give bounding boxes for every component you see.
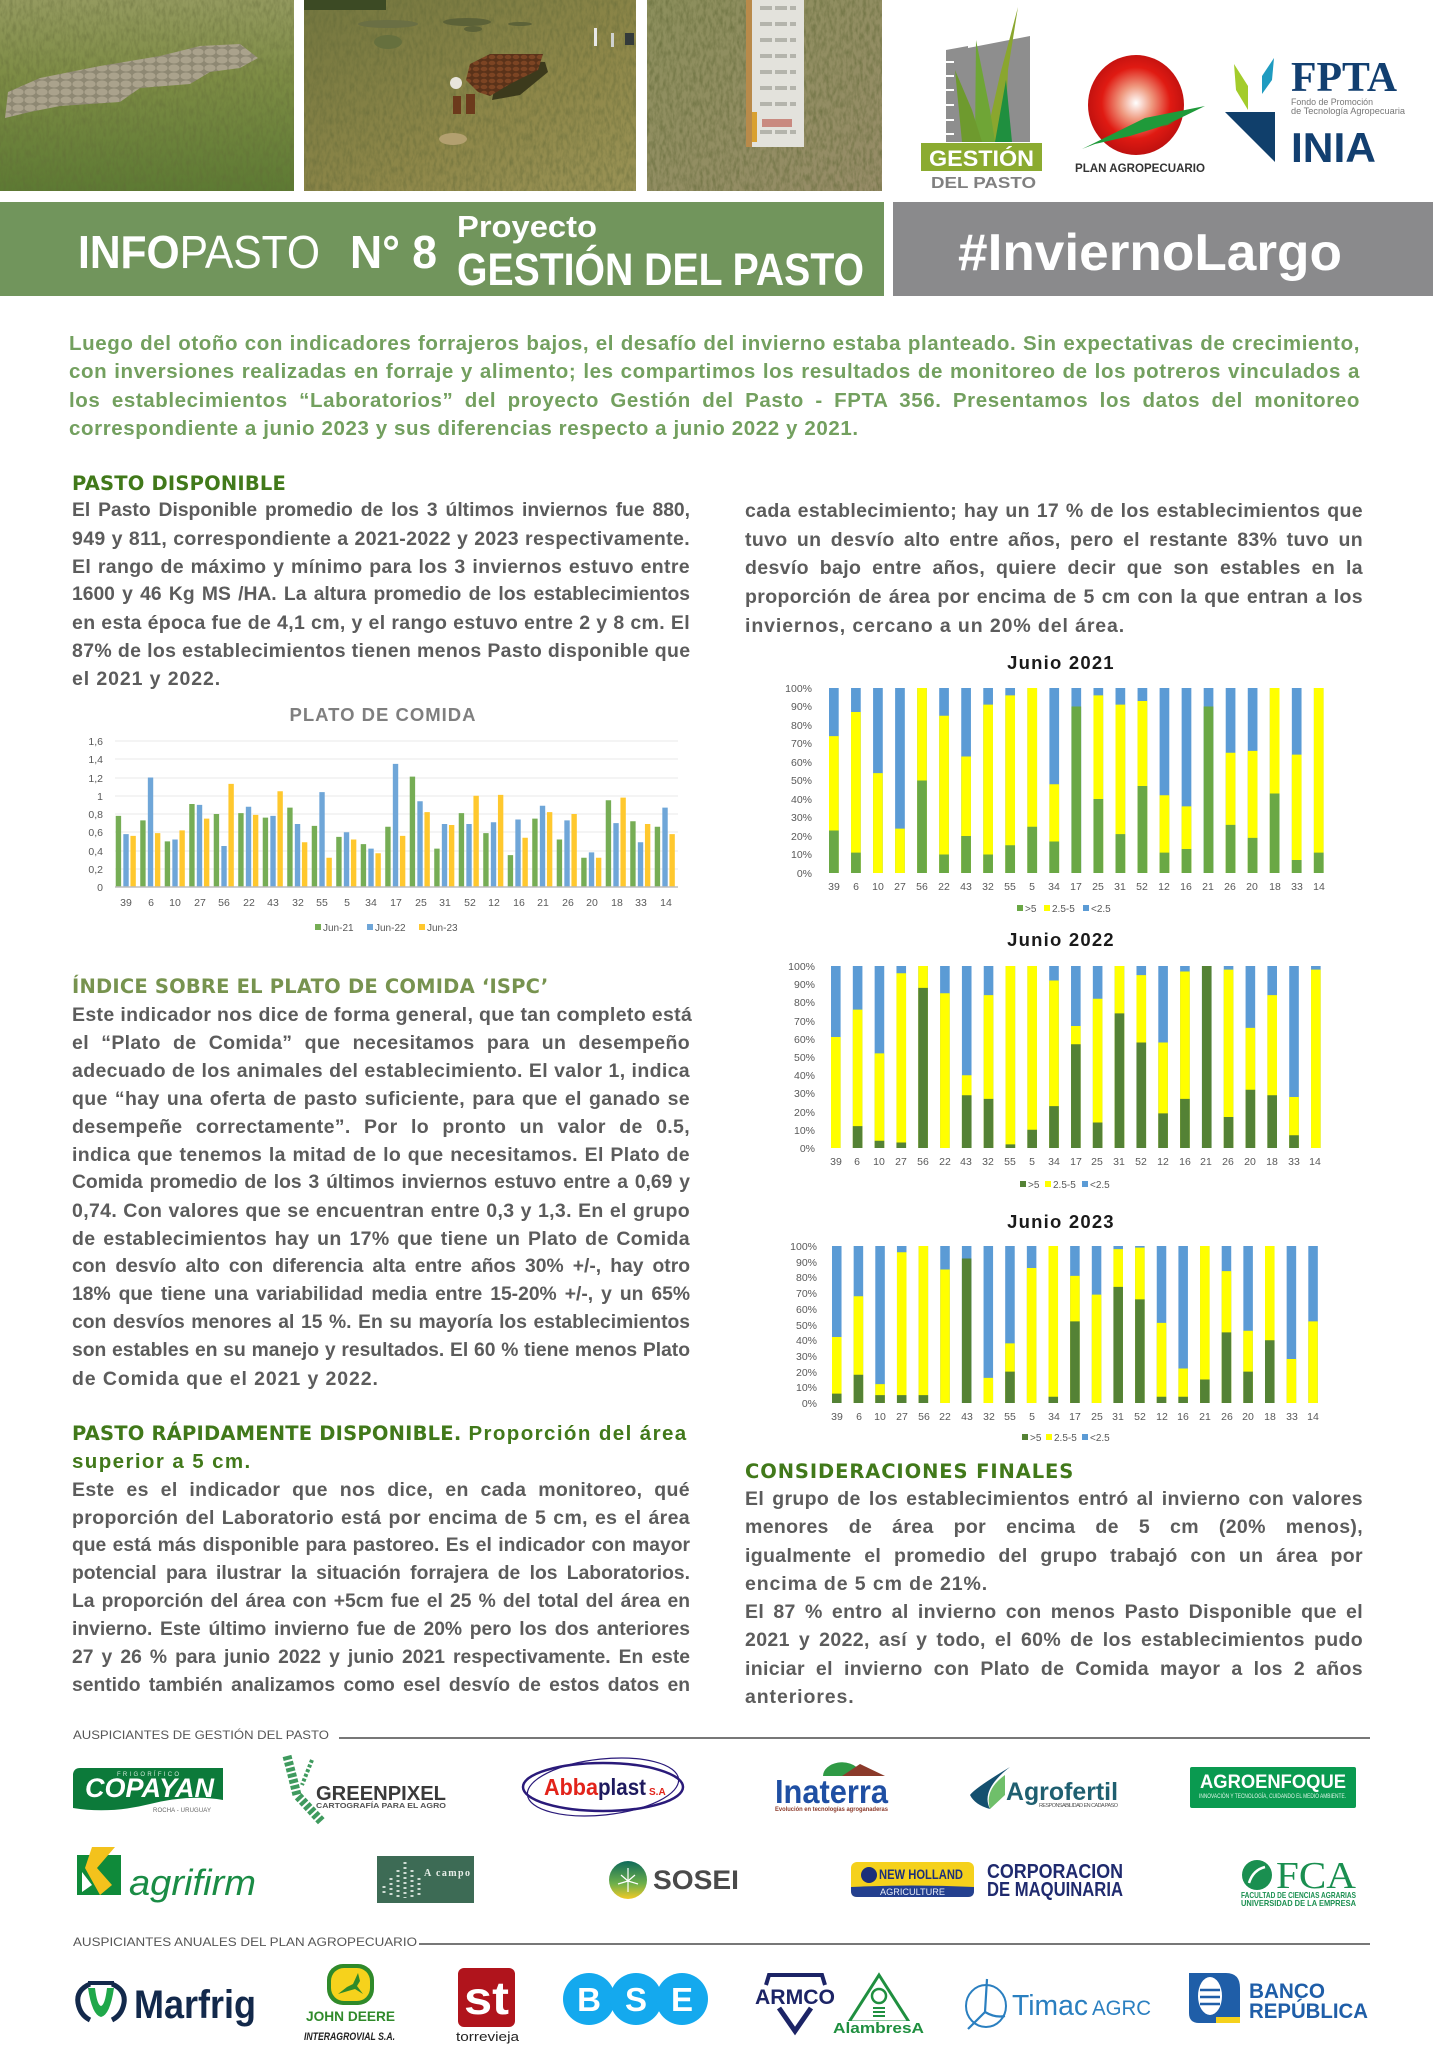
text: índice sobre el plato de comida: con desvío alto con diferencia alta entre años 30% +/-, hay otro [72, 1256, 690, 1277]
chart: Junio 2023: 50% [796, 1320, 817, 1332]
chart: Junio 2023: 26 [1221, 1411, 1233, 1423]
chart: Junio 2022: 10% [794, 1125, 815, 1137]
text: pasto rápidamente disponible: proporción del Laboratorio está por encima de 5 cm, es el área [72, 1507, 690, 1529]
logo: Sosei: SOSEI [653, 1865, 739, 1895]
logo: Greenpixel: GREENPIXEL [316, 1783, 446, 1805]
heading: consideraciones finales: CONSIDERACIONES FINALES [745, 1460, 1074, 1483]
chart: Junio 2021: 6 [853, 881, 859, 893]
chart: Junio 2022: 0% [800, 1143, 815, 1155]
text: índice sobre el plato de comida: Este indicador nos dice de forma general, que tan completo está [72, 1004, 692, 1026]
logo: Marfrig [78, 1983, 256, 2027]
chart: Junio 2023: 56 [918, 1411, 930, 1423]
chart: Junio 2022: 20 [1244, 1156, 1256, 1168]
logo: FCA [1241, 1855, 1357, 1908]
text: índice sobre el plato de comida: Comida promedio de los 3 últimos inviernos estuvo entre a 0,69 y [72, 1172, 690, 1193]
logo: Sosei [609, 1861, 739, 1899]
chart: Junio 2023: 31 [1112, 1411, 1124, 1423]
intro paragraph [69, 332, 1360, 440]
chart: Junio 2022: 16 [1179, 1156, 1191, 1168]
logo: A campo: A campo [424, 1868, 470, 1879]
chart: plato de comida: 33 [635, 897, 647, 909]
intro paragraph: Luego del otoño con indicadores forrajeros bajos, el desafío del invierno estaba planteado. Sin expectativas de crecimiento, [69, 332, 1360, 355]
logo: John Deere [304, 1964, 395, 2043]
text: continuación columna derecha: tuvo un desvío alto entre años, pero el restante 83% tuvo un [745, 529, 1363, 551]
chart: plato de comida: 55 [316, 897, 328, 909]
chart: Junio 2023: 90% [796, 1257, 817, 1269]
text: pasto disponible: 1600 y 46 Kg MS /HA. La altura promedio de los establecimientos [72, 584, 690, 605]
text: consideraciones finales: encima de 5 cm de 21%. [745, 1573, 988, 1595]
chart: Junio 2021: 90% [791, 701, 812, 713]
chart: Junio 2022: 18 [1266, 1156, 1278, 1168]
text: continuación columna derecha: proporción de área por encima de 5 cm con la que entran a los [745, 586, 1363, 608]
chart: plato de comida: 16 [513, 897, 525, 909]
logo: Plan Agropecuario [1075, 55, 1205, 175]
text: índice sobre el plato de comida: indica que tenemos la mitad de lo que necesitamos. El Plato de [72, 1144, 690, 1166]
chart: Junio 2021: 2.5-5 [1052, 904, 1075, 915]
chart: Junio 2023: 20 [1242, 1411, 1254, 1423]
chart: Junio 2021: 10 [872, 881, 884, 893]
chart: Junio 2023: 33 [1286, 1411, 1298, 1423]
chart: Junio 2021: 43 [960, 881, 972, 893]
chart: Junio 2023: 10 [874, 1411, 886, 1423]
text: índice sobre el plato de comida: desempeñe correctamente”. Por lo pronto un valor de 0.5, [72, 1116, 690, 1138]
chart: plato de comida: Jun-23 [427, 923, 458, 934]
logo: Marfrig: Marfrig [134, 1983, 256, 2027]
text: continuación columna derecha: inviernos, cercano a un 20% del área. [745, 615, 1125, 637]
chart: plato de comida: Jun-21 [323, 923, 354, 934]
chart: plato de comida: 14 [660, 897, 672, 909]
chart: Junio 2023: 0% [802, 1398, 817, 1410]
text: índice sobre el plato de comida: con desvíos menores al 15 %. En su mayoría los establecimientos [72, 1312, 690, 1333]
text: continuación columna derecha [745, 500, 1363, 637]
text: consideraciones finales: 2021 y 2022, así y todo, el 60% de los establecimientos pudo [745, 1629, 1363, 1651]
chart: Junio 2022: 26 [1222, 1156, 1234, 1168]
logo: Agrifirm [77, 1847, 256, 1903]
chart: Junio 2023: 5 [1029, 1411, 1035, 1423]
chart: plato de comida: 31 [439, 897, 451, 909]
text: pasto rápidamente disponible: La proporción del área con +5cm fue el 25 % del total del área en [72, 1591, 690, 1612]
chart: plato de comida: 43 [267, 897, 279, 909]
chart: Junio 2023: 60% [796, 1304, 817, 1316]
chart: Junio 2022: <2.5 [1090, 1180, 1110, 1191]
logo: Gestión del Pasto: DEL PASTO [931, 175, 1036, 192]
chart: plato de comida: 25 [415, 897, 427, 909]
chart: Junio 2021: 18 [1269, 881, 1281, 893]
logo: Inaterra: Evolución en tecnologías agroganaderas [775, 1806, 888, 1813]
chart: Junio 2022: 33 [1288, 1156, 1300, 1168]
text: índice sobre el plato de comida: de Comida que el 2021 y 2022. [72, 1368, 379, 1390]
chart: Junio 2023: 16 [1177, 1411, 1189, 1423]
logo: Armco: ARMCO [755, 1986, 835, 2009]
logo: Abbaplast: Abba [544, 1774, 598, 1800]
chart: Junio 2022: 10 [873, 1156, 885, 1168]
logo: FPTA INIA: de Tecnología Agropecuaria [1291, 106, 1405, 116]
chart: Junio 2023: 30% [796, 1351, 817, 1363]
chart: Junio 2023: 2.5-5 [1054, 1433, 1077, 1444]
banner: Infopasto title: Proyecto [457, 209, 597, 244]
heading: pasto rápidamente disponible: superior a 5 cm. [72, 1450, 252, 1473]
logo: New Holland Agriculture: AGRICULTURE [880, 1887, 945, 1898]
text: pasto rápidamente disponible: 27 y 26 % para junio 2022 y junio 2021 respectivamente. En este [72, 1647, 690, 1668]
chart: Junio 2023: 55 [1004, 1411, 1016, 1423]
logo: BSE: B [577, 1981, 601, 2018]
chart: Junio 2022: 14 [1309, 1156, 1321, 1168]
chart: Junio 2021: 26 [1224, 881, 1236, 893]
chart: Junio 2022: >5 [1028, 1180, 1040, 1191]
chart: Junio 2022: 80% [794, 997, 815, 1009]
chart: Junio 2023: 10% [796, 1382, 817, 1394]
chart: Junio 2022: 50% [794, 1052, 815, 1064]
logo: Agrofertil [970, 1767, 1119, 1809]
logo: Agrofertil: RESPONSABILIDAD EN CADA PASO [1039, 1803, 1119, 1809]
chart: Junio 2022: 30% [794, 1088, 815, 1100]
chart: Junio 2023: 52 [1134, 1411, 1146, 1423]
chart: Junio 2021: 30% [791, 812, 812, 824]
logo: Banco República [1189, 1973, 1368, 2023]
logo: FCA: FCA [1276, 1855, 1357, 1897]
chart: Junio 2021: 27 [894, 881, 906, 893]
chart: plato de comida: 0,2 [88, 864, 103, 876]
chart: Junio 2021: 22 [938, 881, 950, 893]
logo: New Holland Agriculture [851, 1862, 974, 1898]
chart: Junio 2021: 34 [1048, 881, 1060, 893]
chart: Junio 2023: 12 [1156, 1411, 1168, 1423]
banner: Infopasto title: GESTIÓN DEL PASTO [457, 244, 864, 295]
series: Jun-21 [116, 777, 660, 887]
logo: John Deere: JOHN DEERE [306, 2008, 395, 2024]
chart: Junio 2021: 70% [791, 738, 812, 750]
chart: Junio 2023: 70% [796, 1288, 817, 1300]
logo: Inaterra [775, 1762, 889, 1813]
logo: FPTA INIA: INIA [1291, 124, 1376, 171]
text: consideraciones finales: iniciar el invierno con Plato de Comida mayor a los 2 años [745, 1658, 1363, 1680]
banner: Infopasto title [0, 202, 884, 296]
chart: plato de comida: 21 [537, 897, 549, 909]
chart: plato de comida: 27 [194, 897, 206, 909]
chart: Junio 2022: Junio 2022 [1007, 929, 1115, 950]
logo: Torrevieja: torrevieja [456, 2029, 520, 2044]
text: pasto rápidamente disponible: potencial para ilustrar la situación forrajera de los Laboratorios. [72, 1563, 690, 1584]
chart: Junio 2023: 14 [1307, 1411, 1319, 1423]
chart: Junio 2021: 52 [1136, 881, 1148, 893]
logo: BSE: E [671, 1981, 693, 2018]
text: índice sobre el plato de comida [72, 1004, 692, 1390]
chart: Junio 2021 [785, 652, 1325, 915]
logo: Gestión del Pasto: GESTIÓN [929, 146, 1034, 171]
chart: plato de comida: 0,6 [88, 827, 103, 839]
logo: Agrofertil: Agrofertil [1006, 1778, 1118, 1806]
chart: plato de comida [88, 704, 678, 934]
chart: Junio 2022: 32 [982, 1156, 994, 1168]
text: pasto disponible: en esta época fue de 4,1 cm, y el rango estuvo entre 2 y 8 cm. El [72, 612, 690, 634]
text: pasto rápidamente disponible: Este es el indicador que nos dice, en cada monitoreo, qué [72, 1479, 690, 1501]
text: consideraciones finales: El 87 % entro al invierno con menos Pasto Disponible que el [745, 1601, 1363, 1623]
chart: Junio 2022: 17 [1070, 1156, 1082, 1168]
logo: BSE [563, 1973, 708, 2025]
chart: Junio 2023: Junio 2023 [1007, 1211, 1115, 1232]
series: Jun-22 [123, 764, 668, 887]
logo: Armco [755, 1975, 835, 2031]
logo: Copayan: FRIGORÍFICO [117, 1771, 179, 1778]
chart: Junio 2021: 5 [1029, 881, 1035, 893]
chart: Junio 2021: 100% [785, 683, 812, 695]
chart: plato de comida: 56 [218, 897, 230, 909]
heading: pasto disponible: PASTO DISPONIBLE [72, 472, 286, 495]
chart: Junio 2021: 39 [828, 881, 840, 893]
chart: Junio 2021: 55 [1004, 881, 1016, 893]
logo: Agroenfoque: INNOVACIÓN Y TECNOLOGÍA, CUIDANDO EL MEDIO AMBIENTE. [1199, 1793, 1346, 1800]
heading: auspiciantes de Gestión del Pasto: AUSPICIANTES DE GESTIÓN DEL PASTO [73, 1727, 329, 1742]
chart: Junio 2021: 12 [1158, 881, 1170, 893]
chart: Junio 2023: >5 [1030, 1433, 1042, 1444]
logo: Abbaplast [523, 1751, 683, 1823]
chart: Junio 2022: 52 [1135, 1156, 1147, 1168]
chart: Junio 2021: 56 [916, 881, 928, 893]
chart: Junio 2021: 20% [791, 831, 812, 843]
chart: plato de comida: Jun-22 [375, 923, 406, 934]
chart: Junio 2023: 80% [796, 1272, 817, 1284]
text: índice sobre el plato de comida: son estables en su manejo y resultados. El 60 % tiene menos Plato [72, 1340, 690, 1361]
text: consideraciones finales: menores de área por encima de 5 cm (20% menos), [745, 1516, 1363, 1538]
text: pasto disponible: el 2021 y 2022. [72, 668, 221, 690]
logo: Alambresa: AlambresA [833, 2020, 924, 2037]
chart: Junio 2022: 90% [794, 979, 815, 991]
text: índice sobre el plato de comida: 18% que tiene una variabilidad media entre 15-20% +/-, y un 65% [72, 1284, 690, 1305]
logo: John Deere: INTERAGROVIAL S.A. [304, 2031, 395, 2043]
logo: Abbaplast: plast [598, 1774, 646, 1800]
chart: plato de comida: 17 [390, 897, 402, 909]
chart: Junio 2021: 0% [797, 868, 812, 880]
text: índice sobre el plato de comida: 0,74. Con valores que se encuentran entre 0,3 y 1,3. En el grupo [72, 1200, 690, 1222]
chart: Junio 2023: 22 [939, 1411, 951, 1423]
chart: plato de comida: 1,4 [88, 754, 103, 766]
chart: Junio 2023: 20% [796, 1367, 817, 1379]
chart: Junio 2022: 60% [794, 1034, 815, 1046]
heading: pasto rápidamente disponible [72, 1422, 688, 1473]
chart: Junio 2022: 55 [1004, 1156, 1016, 1168]
chart: plato de comida: 52 [464, 897, 476, 909]
series: Jun-23 [130, 784, 675, 887]
banner: hashtag: #InviernoLargo [958, 224, 1342, 282]
logo: Agrifirm: agrifirm [129, 1862, 256, 1903]
logo: Greenpixel [287, 1756, 446, 1822]
intro paragraph: los establecimientos “Laboratorios” del proyecto Gestión del Pasto - FPTA 356. Presentamos los datos del monitoreo [69, 389, 1360, 412]
text: pasto disponible: 87% de los establecimientos tienen menos Pasto disponible que [72, 640, 690, 662]
chart: Junio 2022 [788, 929, 1321, 1191]
text: continuación columna derecha: desvío bajo entre años, quiere decir que son estables en la [745, 557, 1363, 579]
chart: plato de comida: 0 [97, 882, 103, 894]
text: pasto disponible: El rango de máximo y mínimo para los 3 inviernos estuvo entre [72, 556, 690, 578]
chart: Junio 2022: 100% [788, 961, 815, 973]
chart: Junio 2021: 20 [1246, 881, 1258, 893]
text: consideraciones finales: igualmente el promedio del grupo trabajó con un área por [745, 1545, 1363, 1567]
chart: Junio 2021: 17 [1070, 881, 1082, 893]
logo: Corporación de Maquinaria: DE MAQUINARIA [987, 1879, 1123, 1901]
chart: Junio 2022: 6 [854, 1156, 860, 1168]
logo: Inaterra: Inaterra [775, 1773, 889, 1810]
chart: plato de comida: 5 [344, 897, 350, 909]
chart: plato de comida: 18 [611, 897, 623, 909]
chart: Junio 2022: 40% [794, 1070, 815, 1082]
logo: BSE: S [625, 1981, 647, 2018]
logo: FPTA INIA: FPTA [1291, 55, 1398, 101]
chart: Junio 2023: 25 [1091, 1411, 1103, 1423]
chart: Junio 2023: 6 [856, 1411, 862, 1423]
logo: Torrevieja: st [464, 1972, 509, 2024]
logo: Timac Agro [966, 1979, 1151, 2029]
text: índice sobre el plato de comida: el “Plato de Comida” que necesitamos para un desempeño [72, 1032, 690, 1054]
logo: FPTA INIA [1225, 55, 1405, 171]
chart: Junio 2021: 80% [791, 720, 812, 732]
chart: plato de comida: 10 [169, 897, 181, 909]
heading: índice sobre el plato de comida: ÍNDICE SOBRE EL PLATO DE COMIDA ‘ISPC’ [72, 975, 548, 998]
logo: Agroenfoque: AGROENFOQUE [1200, 1772, 1346, 1793]
photo: cattle herd aerial [304, 0, 636, 191]
text: pasto disponible: El Pasto Disponible promedio de los 3 últimos inviernos fue 880, [72, 500, 690, 521]
chart: Junio 2023: 17 [1069, 1411, 1081, 1423]
text: pasto rápidamente disponible [72, 1479, 690, 1696]
logo: FCA: UNIVERSIDAD DE LA EMPRESA [1241, 1898, 1356, 1908]
banner: hashtag [893, 202, 1433, 296]
logo: Abbaplast: S.A [649, 1787, 666, 1798]
chart: plato de comida: 20 [586, 897, 598, 909]
chart: Junio 2022: 27 [895, 1156, 907, 1168]
chart: Junio 2023: 21 [1199, 1411, 1211, 1423]
chart: Junio 2022: 5 [1029, 1156, 1035, 1168]
chart: Junio 2021: 10% [791, 849, 812, 861]
chart: Junio 2022: 12 [1157, 1156, 1169, 1168]
text: consideraciones finales [745, 1488, 1363, 1708]
logo: Corporación de Maquinaria [987, 1861, 1123, 1901]
text: continuación columna derecha: cada establecimiento; hay un 17 % de los establecimientos que [745, 500, 1363, 522]
chart: Junio 2022: 25 [1091, 1156, 1103, 1168]
banner: Infopasto title: N° 8 [350, 226, 437, 278]
chart: Junio 2021: >5 [1025, 904, 1037, 915]
chart: plato de comida: 22 [243, 897, 255, 909]
chart: plato de comida: 0,8 [88, 809, 103, 821]
photo: measuring ruler on pasture [647, 0, 882, 191]
chart: plato de comida: PLATO DE COMIDA [290, 704, 476, 725]
text: pasto rápidamente disponible: que está más disponible para pastoreo. Es el indicador con mayor [72, 1535, 690, 1556]
chart: plato de comida: 32 [292, 897, 304, 909]
logo: Copayan [73, 1768, 223, 1814]
chart: Junio 2022: 70% [794, 1016, 815, 1028]
text: pasto rápidamente disponible: invierno. Este último invierno fue de 20% pero los dos anteriores [72, 1619, 690, 1640]
logo: New Holland Agriculture: NEW HOLLAND [879, 1867, 963, 1882]
text: índice sobre el plato de comida: de establecimientos hay un 17% que tiene un Plato de Comida [72, 1228, 690, 1250]
logo: Plan Agropecuario: PLAN AGROPECUARIO [1075, 161, 1205, 175]
chart: plato de comida: 1,6 [88, 736, 103, 748]
chart: Junio 2021: 25 [1092, 881, 1104, 893]
logo: Copayan: COPAYAN [85, 1773, 214, 1803]
chart: Junio 2022: 21 [1200, 1156, 1212, 1168]
chart: Junio 2022: 20% [794, 1107, 815, 1119]
chart: Junio 2022: 56 [917, 1156, 929, 1168]
chart: Junio 2022: 22 [939, 1156, 951, 1168]
chart: Junio 2022: 34 [1048, 1156, 1060, 1168]
chart: plato de comida: 39 [120, 897, 132, 909]
chart: Junio 2023: 18 [1264, 1411, 1276, 1423]
logo: FCA: FACULTAD DE CIENCIAS AGRARIAS [1241, 1890, 1356, 1900]
chart: Junio 2021: 31 [1114, 881, 1126, 893]
text: pasto disponible [72, 500, 690, 690]
intro paragraph: con inversiones realizadas en forraje y alimento; les compartimos los resultados de monitoreo de los potreros vinculados a [69, 360, 1360, 383]
text: consideraciones finales: anteriores. [745, 1686, 855, 1708]
chart: plato de comida: 1,2 [88, 773, 103, 785]
heading: pasto rápidamente disponible: PASTO RÁPIDAMENTE DISPONIBLE. Proporción del área [72, 1422, 688, 1445]
chart: Junio 2021: <2.5 [1091, 904, 1111, 915]
chart: Junio 2023: 43 [961, 1411, 973, 1423]
chart: plato de comida: 12 [488, 897, 500, 909]
chart: Junio 2023: 27 [896, 1411, 908, 1423]
chart: plato de comida: 26 [562, 897, 574, 909]
logo: Gestión del Pasto [921, 7, 1042, 192]
logo: Banco República: REPÚBLICA [1249, 1999, 1368, 2023]
chart: Junio 2023: 39 [831, 1411, 843, 1423]
chart: Junio 2021: 60% [791, 757, 812, 769]
logo: Torrevieja [456, 1968, 520, 2044]
chart: Junio 2023: 100% [790, 1241, 817, 1253]
logo: A campo [377, 1856, 474, 1903]
text: consideraciones finales: El grupo de los establecimientos entró al invierno con valores [745, 1488, 1363, 1510]
logo: Timac Agro: Timac [1012, 1990, 1088, 2022]
logo: Corporación de Maquinaria: CORPORACION [987, 1861, 1123, 1883]
chart: Junio 2021: 16 [1180, 881, 1192, 893]
chart: Junio 2023: 34 [1048, 1411, 1060, 1423]
chart: Junio 2021: 32 [982, 881, 994, 893]
logo: Greenpixel: CARTOGRAFÍA PARA EL AGRO [316, 1801, 446, 1810]
text: pasto disponible: 949 y 811, correspondiente a 2021-2022 y 2023 respectivamente. [72, 528, 690, 550]
chart: Junio 2022: 43 [960, 1156, 972, 1168]
text: pasto rápidamente disponible: sentido también analizamos como esel desvío de estos datos en [72, 1675, 690, 1696]
chart: Junio 2021: 21 [1202, 881, 1214, 893]
chart: plato de comida: 1 [97, 791, 103, 803]
chart: Junio 2021: 40% [791, 794, 812, 806]
text: índice sobre el plato de comida: que “hay una oferta de pasto suficiente, para que el ganado se [72, 1088, 690, 1110]
chart: Junio 2023 [790, 1211, 1319, 1444]
chart: Junio 2023: 32 [983, 1411, 995, 1423]
text: índice sobre el plato de comida: adecuado de los animales del establecimiento. El valor 1, indica [72, 1060, 690, 1082]
chart: plato de comida: 0,4 [88, 846, 103, 858]
logo: Banco República: BANCO [1249, 1980, 1325, 2003]
banner: Infopasto title: INFOPASTO [78, 226, 320, 278]
photo: sheep flock on pasture [0, 0, 294, 191]
chart: Junio 2022: 2.5-5 [1053, 1180, 1076, 1191]
logo: FPTA INIA: Fondo de Promoción [1291, 97, 1373, 107]
logo: Timac Agro: AGRC [1092, 1997, 1151, 2020]
logo: Alambresa [833, 1975, 924, 2037]
logo: Copayan: ROCHA - URUGUAY [153, 1808, 211, 1814]
chart: Junio 2022: 39 [830, 1156, 842, 1168]
chart: Junio 2021: 50% [791, 775, 812, 787]
logo: Agroenfoque [1190, 1767, 1356, 1808]
chart: Junio 2021: 14 [1313, 881, 1325, 893]
chart: Junio 2022: 31 [1113, 1156, 1125, 1168]
chart: plato de comida: 6 [148, 897, 154, 909]
chart: plato de comida: 34 [365, 897, 377, 909]
chart: Junio 2023: 40% [796, 1335, 817, 1347]
intro paragraph: correspondiente a junio 2023 y sus diferencias respecto a junio 2022 y 2021. [69, 417, 859, 440]
chart: Junio 2021: 33 [1291, 881, 1303, 893]
heading: auspiciantes anuales del Plan Agropecuario: AUSPICIANTES ANUALES DEL PLAN AGROPECUARIO [73, 1935, 417, 1949]
chart: Junio 2023: <2.5 [1090, 1433, 1110, 1444]
chart: Junio 2021: Junio 2021 [1007, 652, 1115, 673]
